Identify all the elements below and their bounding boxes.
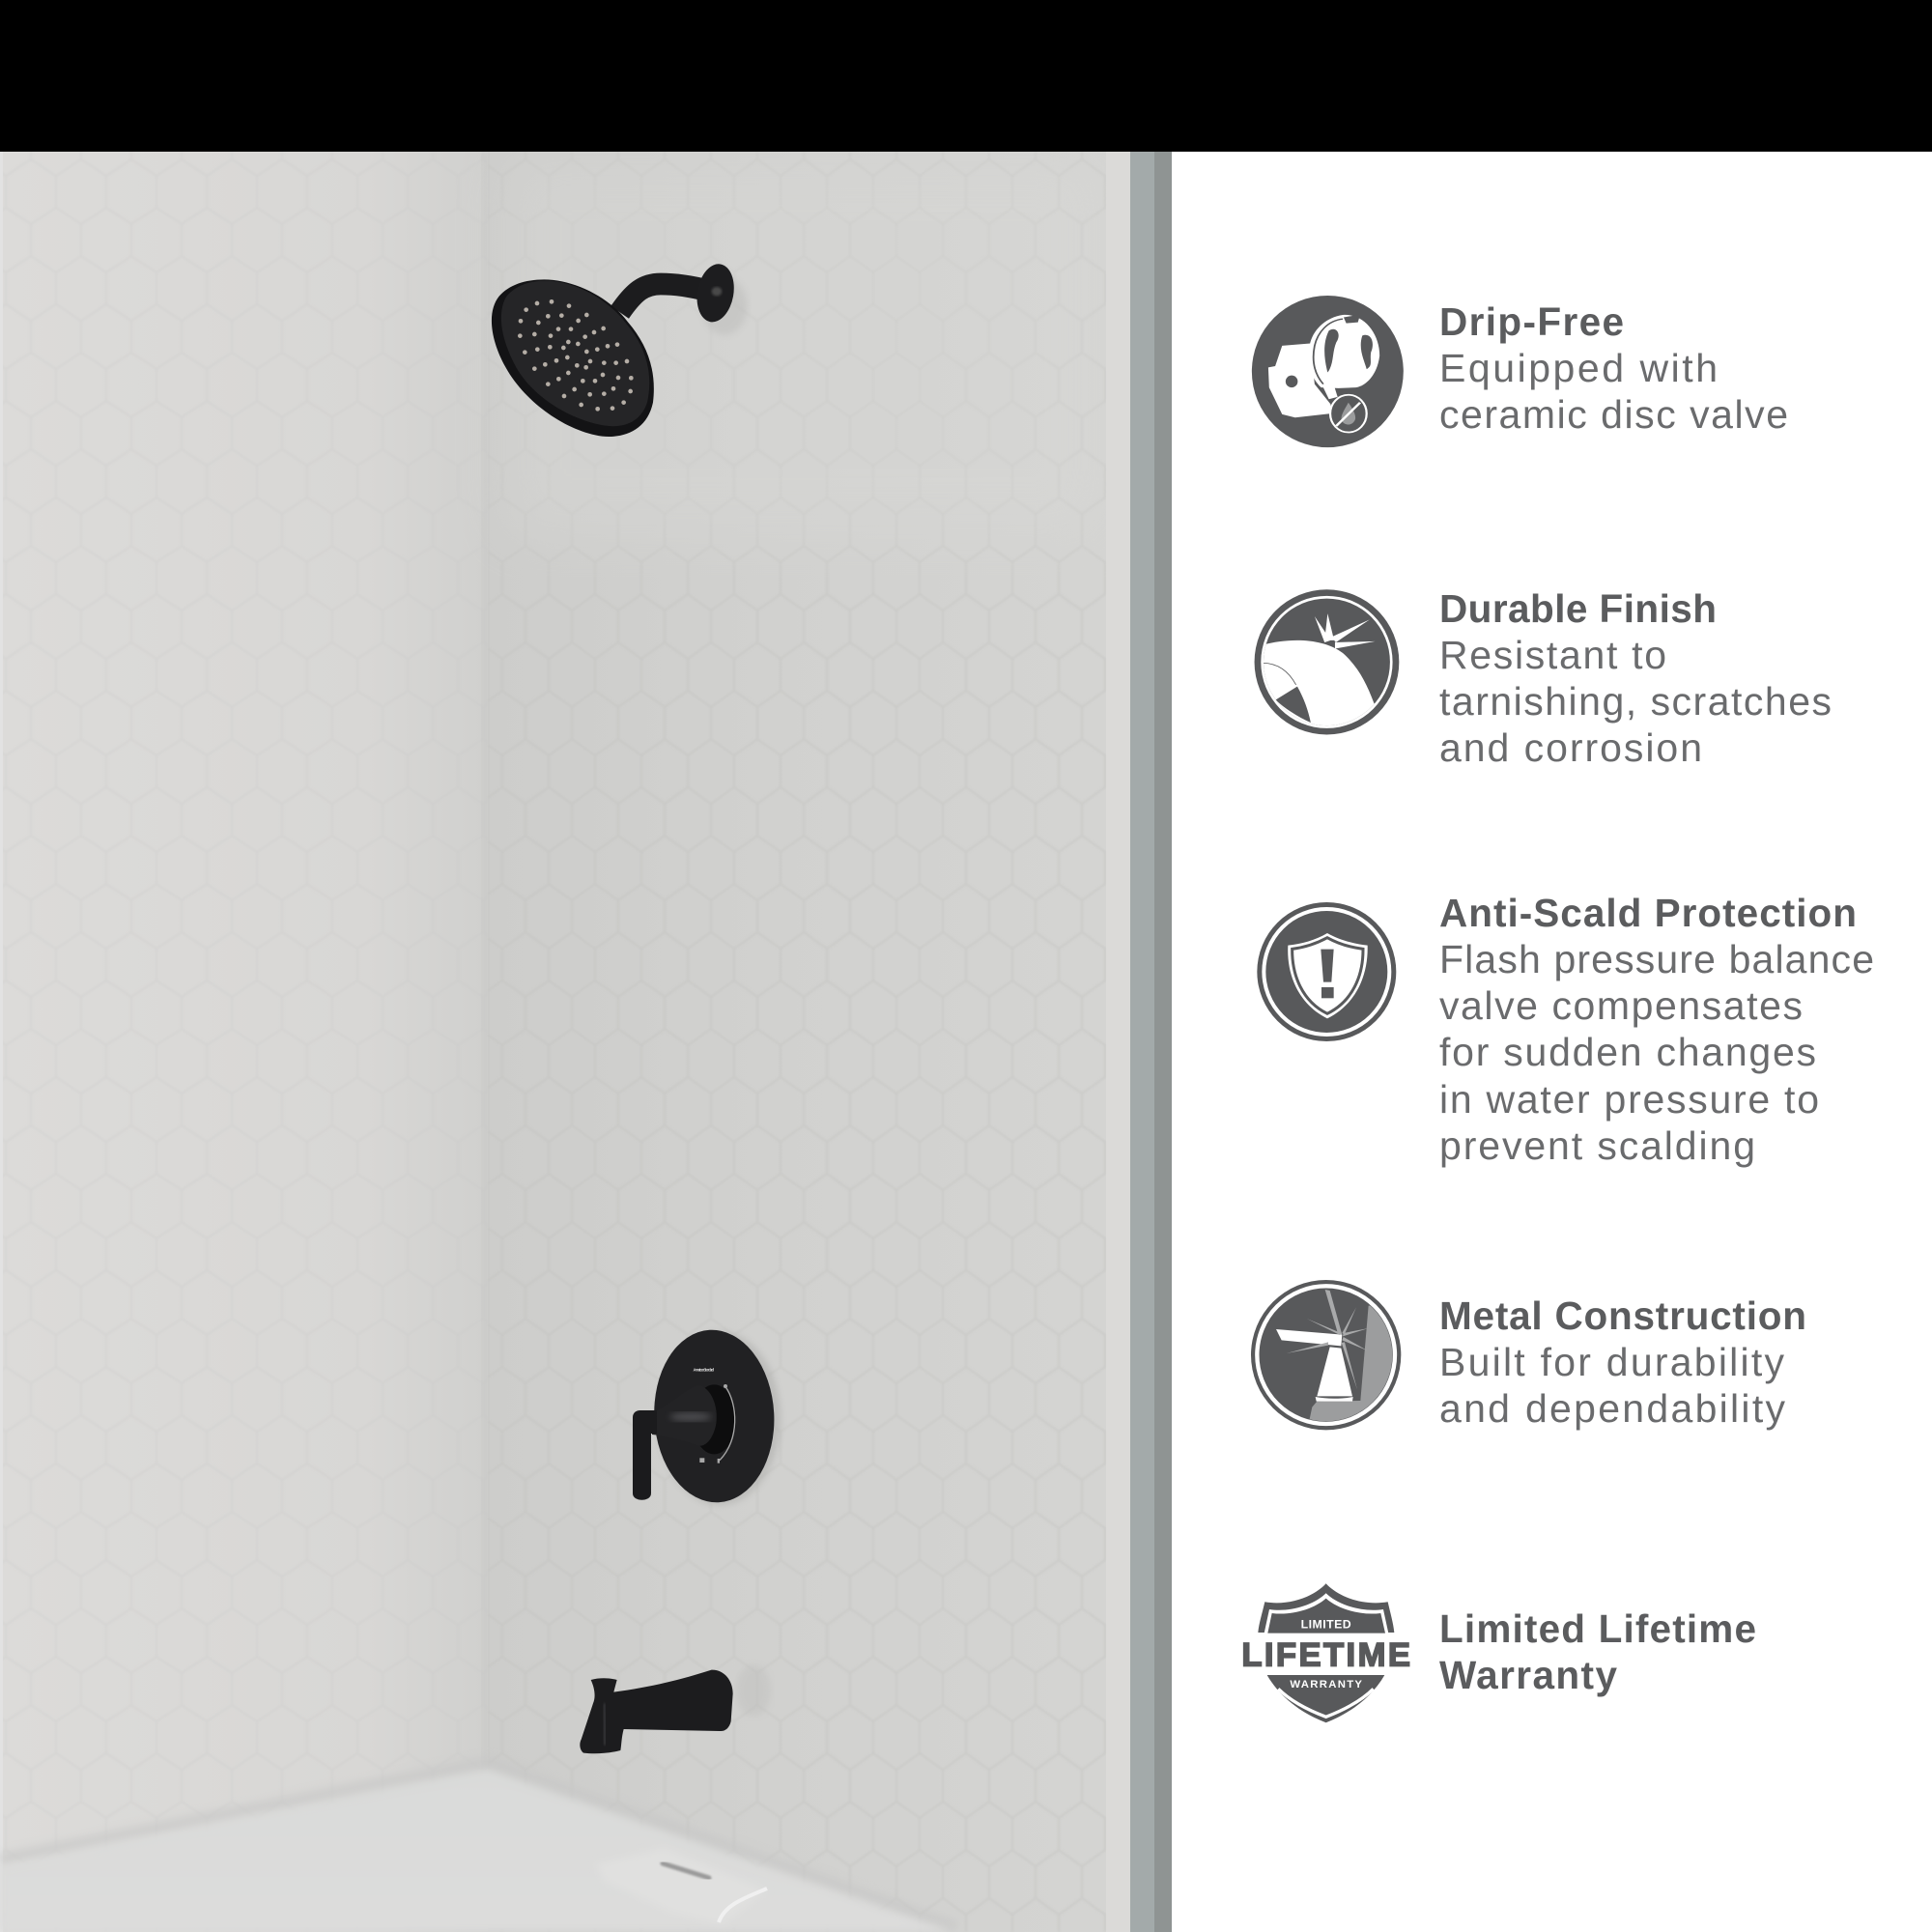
feature text: in water pressure to xyxy=(1439,1077,1819,1122)
bathtub xyxy=(0,1770,952,1932)
panel: feature list xyxy=(1242,296,1872,1723)
door frame dark xyxy=(1154,152,1172,1932)
spray nozzles xyxy=(518,299,634,412)
feature: Metal Construction xyxy=(1251,1280,1806,1431)
escutcheon plate xyxy=(650,1327,779,1505)
feature text: prevent scalding xyxy=(1439,1123,1755,1168)
feature text: Resistant to xyxy=(1439,633,1666,677)
feature text: Warranty xyxy=(1439,1653,1617,1697)
shower head xyxy=(492,261,747,437)
feature text: Anti-Scald Protection xyxy=(1439,891,1857,935)
right wall tile pattern xyxy=(488,152,1106,1932)
header bar xyxy=(0,0,1932,152)
icon: lifetime warranty badge: LIMITED xyxy=(1301,1618,1351,1632)
spout body xyxy=(580,1670,733,1753)
feature text xyxy=(1439,1606,1756,1697)
feature text: and corrosion xyxy=(1439,725,1702,770)
feature text: Equipped with xyxy=(1439,346,1718,390)
wall shadow xyxy=(736,1664,771,1717)
plate shadow xyxy=(659,1331,781,1505)
icon: lifetime warranty badge: LIFETIME xyxy=(1241,1637,1410,1674)
top wall light xyxy=(502,152,1105,538)
overflow plate xyxy=(596,1848,767,1924)
feature: Durable Finish xyxy=(1243,586,1832,770)
feature text: Built for durability xyxy=(1439,1340,1785,1384)
left wall edge xyxy=(0,152,3,1932)
brand mark: American Standard xyxy=(693,1368,714,1373)
feature text: Limited Lifetime xyxy=(1439,1606,1756,1651)
feature text xyxy=(1439,1293,1806,1431)
feature text xyxy=(1439,586,1832,770)
icon: lifetime warranty badge xyxy=(1241,1583,1410,1722)
feature text: Metal Construction xyxy=(1439,1293,1806,1338)
feature text xyxy=(1439,891,1874,1168)
feature text: for sudden changes xyxy=(1439,1030,1816,1074)
head body xyxy=(492,279,654,437)
white background xyxy=(1172,152,1932,1932)
handle hub xyxy=(652,1385,717,1446)
door frame light xyxy=(1130,152,1154,1932)
left wall xyxy=(0,152,488,1932)
icon: metal handle xyxy=(1251,1280,1401,1430)
soft shadow xyxy=(702,277,747,335)
feature text xyxy=(1439,299,1788,437)
icon: shield alert xyxy=(1257,902,1396,1041)
flange highlight xyxy=(712,287,722,296)
tub spout xyxy=(580,1664,771,1753)
icon: lifetime warranty badge: WARRANTY xyxy=(1290,1679,1362,1690)
feature text: Drip-Free xyxy=(1439,299,1624,344)
icon: durable finish xyxy=(1254,589,1399,734)
tub shadow line xyxy=(0,1762,956,1927)
feature text: Flash pressure balance xyxy=(1439,937,1874,981)
dial recess xyxy=(693,1384,736,1454)
feature text: tarnishing, scratches xyxy=(1439,679,1832,724)
icon: ceramic disc valve xyxy=(1252,296,1404,447)
wall corner shadow xyxy=(482,152,489,1770)
lever handle xyxy=(633,1410,657,1500)
valve trim xyxy=(633,1327,781,1505)
feature: Drip-Free xyxy=(1252,296,1788,447)
feature: Anti-Scald Protection xyxy=(1257,891,1874,1168)
wall end trim xyxy=(1106,152,1130,1932)
feature text: ceramic disc valve xyxy=(1439,392,1788,437)
spout highlight xyxy=(604,1703,606,1746)
feature text: and dependability xyxy=(1439,1386,1785,1431)
hot and cold marks xyxy=(699,1384,727,1463)
panel: bathroom photo xyxy=(0,152,1172,1932)
shower arm xyxy=(620,284,708,312)
left wall tile pattern xyxy=(0,152,488,1932)
right wall xyxy=(488,152,1106,1932)
feature text: valve compensates xyxy=(1439,983,1803,1028)
head face xyxy=(501,281,649,426)
flange xyxy=(693,261,738,325)
feature text: Durable Finish xyxy=(1439,586,1717,631)
temperature arc xyxy=(720,1386,735,1461)
feature: Limited Lifetime Warranty xyxy=(1241,1583,1756,1722)
hub highlight xyxy=(669,1412,712,1421)
